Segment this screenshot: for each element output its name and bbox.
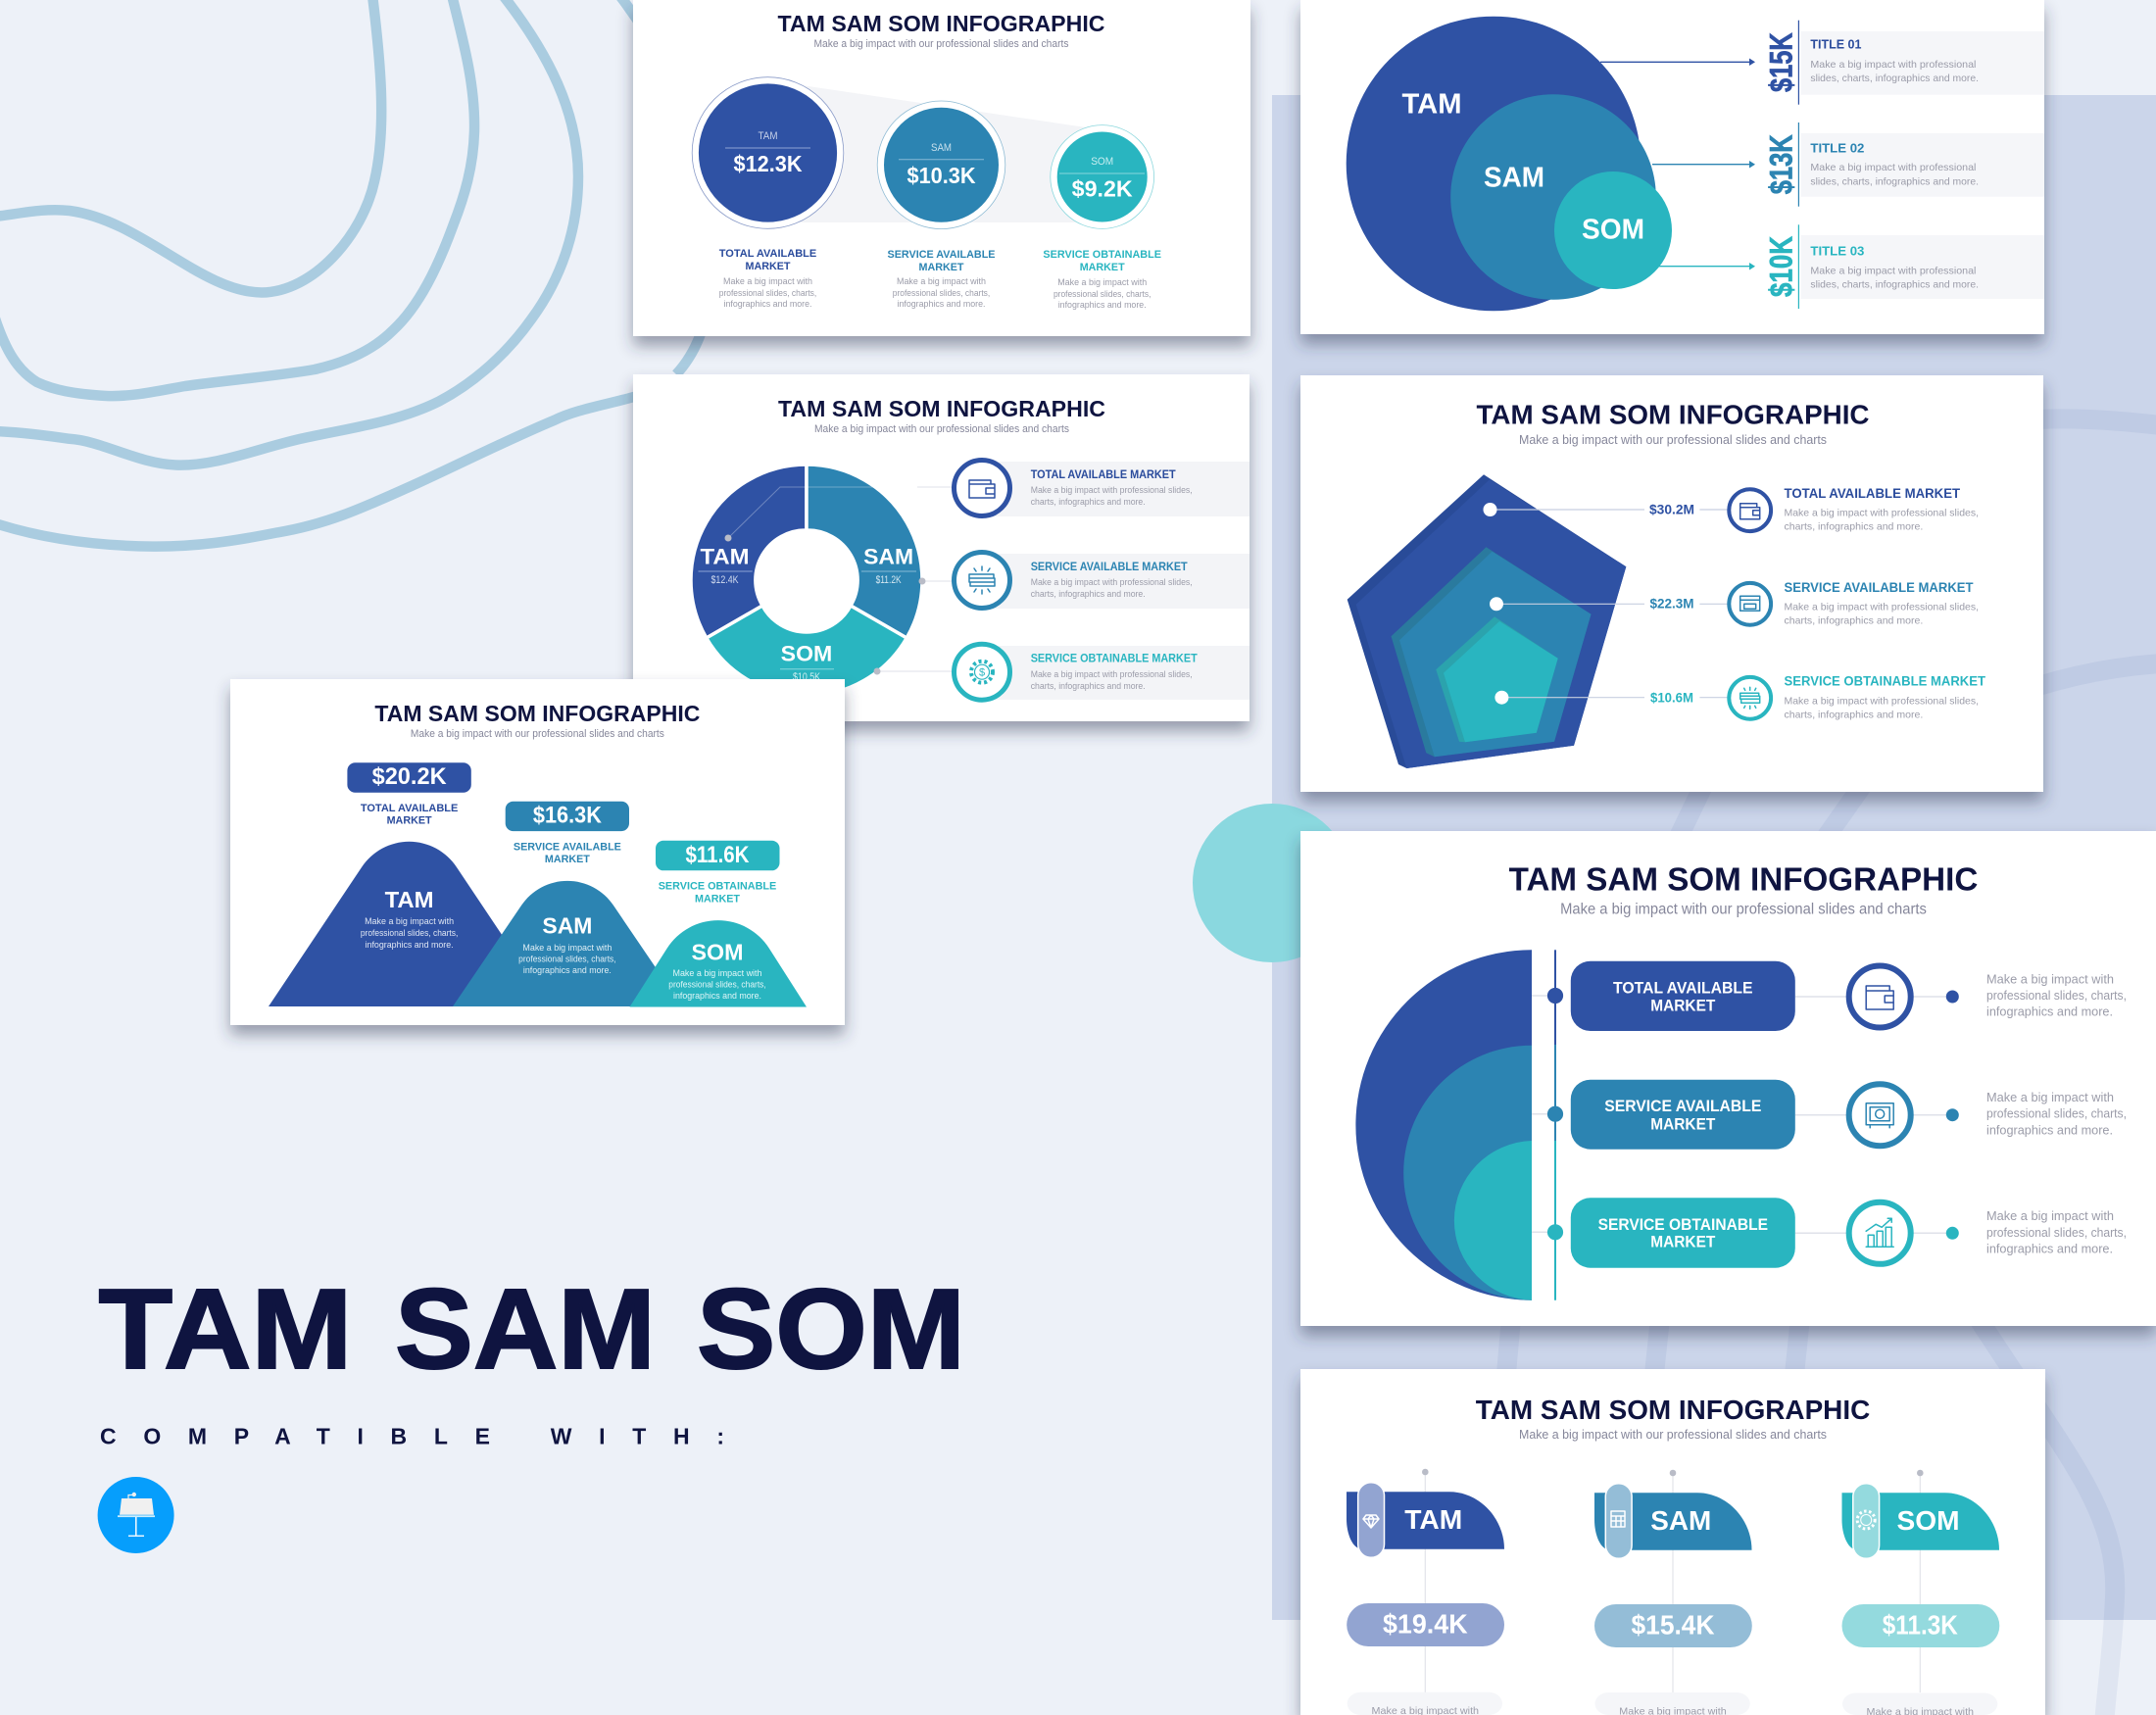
- column: SAM: [1594, 1470, 1752, 1715]
- row: service available market: MARKET: [1650, 1115, 1715, 1133]
- icon: money ring: [955, 553, 1009, 608]
- row: title 02: [1764, 122, 2044, 207]
- row: title 03: $10K: [1764, 236, 1799, 297]
- text block: total available market: professional slides, charts,: [719, 288, 816, 298]
- row: title 02: TITLE 02: [1810, 141, 1864, 155]
- circle: SOM: SOM: [1091, 156, 1113, 168]
- subheading: Make a big impact with our professional slides and charts: [814, 423, 1069, 435]
- grey funnel backdrop: [767, 85, 1086, 222]
- icon: keynote badge: [98, 1477, 174, 1553]
- text block: service available market: professional slides, charts,: [893, 288, 990, 298]
- row text: service available market: Make a big impact with professional slides,: [1031, 577, 1193, 587]
- circle: SAM: SAM: [931, 142, 952, 154]
- donut labels: [698, 545, 916, 683]
- heading: TAM SAM SOM INFOGRAPHIC: [778, 11, 1105, 36]
- row text: total available market: charts, infographics and more.: [1031, 497, 1146, 507]
- arrow: SAM: [1652, 161, 1755, 169]
- icon: money ring: [1729, 677, 1771, 719]
- value pill: SAM: [506, 802, 629, 831]
- background contour curves: [0, 0, 710, 547]
- circle: TAM: [692, 77, 844, 228]
- column: SOM: SOM: [1897, 1505, 1960, 1536]
- text block: total available market: [719, 248, 816, 309]
- value pill: TAM: [347, 762, 471, 793]
- text block: service available market: MARKET: [919, 262, 964, 273]
- row: title 02: Make a big impact with professional: [1810, 162, 1976, 173]
- values: $30.2M: [1649, 503, 1694, 517]
- mountain: SOM: professional slides, charts,: [668, 980, 766, 990]
- row text: service available market: [1031, 562, 1193, 599]
- row text: total available market: TOTAL AVAILABLE MARKET: [1031, 469, 1176, 481]
- values: $22.3M: [1650, 597, 1693, 612]
- row: service obtainable market: MARKET: [1650, 1234, 1715, 1251]
- mountain: SAM: SAM: [542, 913, 592, 939]
- row text: total available market: [1784, 486, 1979, 533]
- text block: service obtainable market: professional slides, charts,: [1054, 289, 1151, 299]
- text block: service obtainable market: SERVICE OBTAINABLE: [1043, 249, 1161, 261]
- row: service available market: SERVICE AVAILABLE: [1604, 1098, 1761, 1115]
- compatible with label: COMPATIBLE WITH:: [100, 1424, 724, 1449]
- text block: total available market: TOTAL AVAILABLE: [719, 248, 816, 260]
- main title: SAM: [395, 1265, 656, 1393]
- mountain: TAM: infographics and more.: [366, 940, 454, 950]
- main title: TAM: [98, 1265, 353, 1393]
- text block: service obtainable market: MARKET: [1080, 262, 1125, 273]
- row: service obtainable market: [1571, 1198, 2127, 1268]
- donut labels: TAM: [700, 545, 749, 569]
- heading: TAM SAM SOM INFOGRAPHIC: [1476, 1395, 1870, 1425]
- row backgrounds: [970, 462, 1250, 700]
- panel: half-circle slide: [1300, 831, 2156, 1326]
- label: total available market: TOTAL AVAILABLE: [361, 803, 458, 814]
- row text: service obtainable market: charts, infographics and more.: [1784, 710, 1923, 721]
- value pill: SOM: $11.6K: [686, 842, 750, 868]
- mountain: SOM: SOM: [692, 939, 743, 964]
- subheading: Make a big impact with our professional slides and charts: [411, 728, 664, 740]
- text block: total available market: infographics and more.: [723, 299, 811, 309]
- row text: service obtainable market: charts, infographics and more.: [1031, 681, 1146, 691]
- venn diagram: TAM: [1401, 88, 1462, 120]
- main title: SOM: [697, 1265, 965, 1393]
- venn diagram: [1347, 17, 1672, 311]
- panel: venn slide: [1300, 0, 2044, 334]
- heading: TAM SAM SOM INFOGRAPHIC: [374, 701, 700, 726]
- row text: service available market: charts, infographics and more.: [1031, 589, 1146, 599]
- venn diagram: SOM: [1582, 215, 1644, 246]
- row: total available market: Make a big impact with: [1986, 971, 2114, 986]
- row text: service available market: SERVICE AVAILABLE MARKET: [1784, 580, 1974, 595]
- row text: service obtainable market: [1784, 674, 1986, 721]
- label: total available market: MARKET: [387, 815, 432, 827]
- faint band curves: [1506, 418, 2156, 1715]
- text block: service available market: Make a big impact with: [897, 276, 986, 286]
- row: service obtainable market: Make a big impact with: [1986, 1208, 2114, 1223]
- timeline spine: [1532, 950, 1563, 1300]
- row: title 01: Make a big impact with professional: [1810, 59, 1976, 71]
- row: total available market: infographics and more.: [1986, 1004, 2113, 1019]
- circle: TAM: TAM: [759, 130, 778, 142]
- label: service available market: SERVICE AVAILABLE: [514, 842, 621, 854]
- text block: total available market: Make a big impact with: [723, 276, 812, 286]
- subheading: Make a big impact with our professional slides and charts: [1519, 1427, 1827, 1442]
- label: service obtainable market: MARKET: [695, 893, 740, 905]
- row text: total available market: Make a big impact with professional slides,: [1784, 508, 1979, 519]
- arrow: TAM: [1600, 59, 1755, 66]
- teal decorative circle: [1193, 804, 1351, 962]
- row text: service available market: [1784, 580, 1979, 627]
- right background band: [1272, 95, 2156, 1620]
- row: service available market: infographics and more.: [1986, 1123, 2113, 1138]
- icon: gear ring: $: [979, 667, 985, 679]
- main title: [98, 1265, 965, 1393]
- text block: service obtainable market: Make a big impact with: [1057, 277, 1147, 287]
- mountain: TAM: Make a big impact with: [365, 916, 454, 926]
- subheading: Make a big impact with our professional slides and charts: [813, 38, 1069, 50]
- row: title 03: slides, charts, infographics and more.: [1810, 279, 1979, 291]
- column: TAM: $19.4K: [1383, 1609, 1468, 1640]
- row: service available market: professional slides, charts,: [1986, 1106, 2127, 1121]
- heading: TAM SAM SOM INFOGRAPHIC: [778, 396, 1105, 421]
- panel: tabs slide: [1300, 1369, 2045, 1715]
- row text: service available market: SERVICE AVAILABLE MARKET: [1031, 562, 1188, 573]
- row: total available market: [1571, 961, 2127, 1031]
- donut chart: [691, 465, 922, 696]
- row text: total available market: charts, infographics and more.: [1784, 521, 1923, 533]
- row: title 01: TITLE 01: [1810, 38, 1861, 52]
- values: [1649, 503, 1694, 705]
- text block: total available market: MARKET: [745, 261, 791, 272]
- subheading: Make a big impact with our professional slides and charts: [1519, 432, 1827, 447]
- nested 3D pentagons: [1348, 474, 1626, 768]
- row: service available market: Make a big impact with: [1986, 1090, 2114, 1104]
- arrow: SOM: [1659, 263, 1755, 270]
- text block: service obtainable market: infographics and more.: [1058, 300, 1147, 310]
- row text: service obtainable market: Make a big impact with professional slides,: [1784, 695, 1979, 707]
- label: service available market: [514, 842, 621, 865]
- row: title 01: slides, charts, infographics and more.: [1810, 73, 1979, 84]
- panel: circles slide: [633, 0, 1250, 336]
- pentagon callout lines: [1484, 503, 1728, 705]
- heading: TAM SAM SOM INFOGRAPHIC: [1509, 860, 1978, 897]
- donut labels: SOM: [781, 642, 832, 666]
- label: total available market: [361, 803, 458, 827]
- row: service obtainable market: professional slides, charts,: [1986, 1225, 2127, 1240]
- label: service obtainable market: [659, 881, 776, 905]
- circle: TAM: $12.3K: [733, 151, 803, 176]
- venn diagram: SAM: [1484, 163, 1544, 194]
- row text: service obtainable market: SERVICE OBTAINABLE MARKET: [1784, 674, 1986, 689]
- row: service obtainable market: infographics and more.: [1986, 1241, 2113, 1255]
- row: title 03: [1764, 224, 2044, 309]
- row text: service obtainable market: [1031, 654, 1198, 691]
- icon: cash ring: [1729, 583, 1771, 625]
- row: title 02: $13K: [1764, 134, 1799, 194]
- mountain: SAM: infographics and more.: [523, 965, 612, 975]
- mountain: SAM: Make a big impact with: [522, 943, 612, 953]
- row text: total available market: [1031, 469, 1193, 507]
- mountain: SOM: Make a big impact with: [672, 968, 762, 978]
- nested half circles: [1355, 950, 1532, 1300]
- row: total available market: MARKET: [1650, 997, 1715, 1014]
- row: title 02: slides, charts, infographics and more.: [1810, 175, 1979, 187]
- row text: service obtainable market: Make a big impact with professional slides,: [1031, 669, 1193, 679]
- mountain: SAM: [453, 881, 682, 1006]
- row text: total available market: Make a big impact with professional slides,: [1031, 485, 1193, 495]
- mountain: SOM: infographics and more.: [673, 991, 761, 1001]
- text block: service available market: SERVICE AVAILABLE: [888, 249, 996, 261]
- text block: service available market: infographics and more.: [898, 299, 986, 309]
- column: TAM: [1347, 1469, 1504, 1715]
- text block: service available market: [888, 249, 996, 309]
- row: title 03: Make a big impact with professional: [1810, 265, 1976, 276]
- circle: SOM: $9.2K: [1072, 176, 1133, 202]
- row: title 01: $15K: [1764, 32, 1799, 92]
- donut labels: SAM: [863, 545, 913, 569]
- callout connectors: [725, 487, 953, 674]
- subheading: Make a big impact with our professional slides and charts: [1560, 902, 1927, 918]
- column: SAM: $15.4K: [1631, 1610, 1715, 1641]
- label: service obtainable market: SERVICE OBTAINABLE: [659, 881, 776, 893]
- mountain: SOM: [629, 920, 807, 1007]
- donut labels: $12.4K: [711, 574, 739, 586]
- icon: wallet ring: [1729, 489, 1771, 531]
- row text: service available market: Make a big impact with professional slides,: [1784, 601, 1979, 612]
- row text: service available market: charts, infographics and more.: [1784, 615, 1923, 627]
- mountain: TAM: TAM: [385, 887, 434, 912]
- circle: SOM: [1051, 125, 1154, 228]
- row: title 03: TITLE 03: [1810, 244, 1864, 258]
- heading: TAM SAM SOM INFOGRAPHIC: [1476, 400, 1870, 430]
- mountain: TAM: [269, 842, 550, 1006]
- circle: SAM: $10.3K: [907, 163, 976, 188]
- value pill: SOM: [656, 841, 780, 870]
- mountain: SAM: professional slides, charts,: [518, 955, 616, 964]
- value pill: TAM: $20.2K: [372, 763, 447, 790]
- mountain: TAM: professional slides, charts,: [361, 928, 458, 938]
- values: $10.6M: [1650, 690, 1693, 705]
- label: service available market: MARKET: [545, 854, 590, 865]
- column: TAM: TAM: [1404, 1504, 1462, 1535]
- column: SOM: $11.3K: [1883, 1610, 1958, 1641]
- row: service available market: [1571, 1080, 2127, 1150]
- circle: SAM: [877, 101, 1005, 229]
- icon: wallet ring: [955, 461, 1009, 515]
- column: SAM: SAM: [1650, 1505, 1711, 1536]
- panel: mountains slide: [230, 679, 845, 1025]
- row: total available market: TOTAL AVAILABLE: [1613, 979, 1753, 997]
- text block: service obtainable market: [1043, 249, 1161, 310]
- donut labels: $11.2K: [876, 574, 902, 586]
- donut labels: $10.5K: [793, 671, 821, 683]
- panel: pentagon slide: [1300, 375, 2043, 792]
- icon: gear ring: [955, 644, 1009, 700]
- row text: service obtainable market: SERVICE OBTAINABLE MARKET: [1031, 654, 1198, 665]
- row: service obtainable market: SERVICE OBTAINABLE: [1598, 1216, 1768, 1234]
- row text: total available market: TOTAL AVAILABLE MARKET: [1784, 486, 1961, 501]
- row: title 01: [1764, 21, 2044, 105]
- row: total available market: professional slides, charts,: [1986, 988, 2127, 1003]
- column: SOM: [1842, 1470, 1999, 1715]
- value pill: SAM: $16.3K: [533, 802, 603, 828]
- panel: donut slide: [633, 374, 1250, 721]
